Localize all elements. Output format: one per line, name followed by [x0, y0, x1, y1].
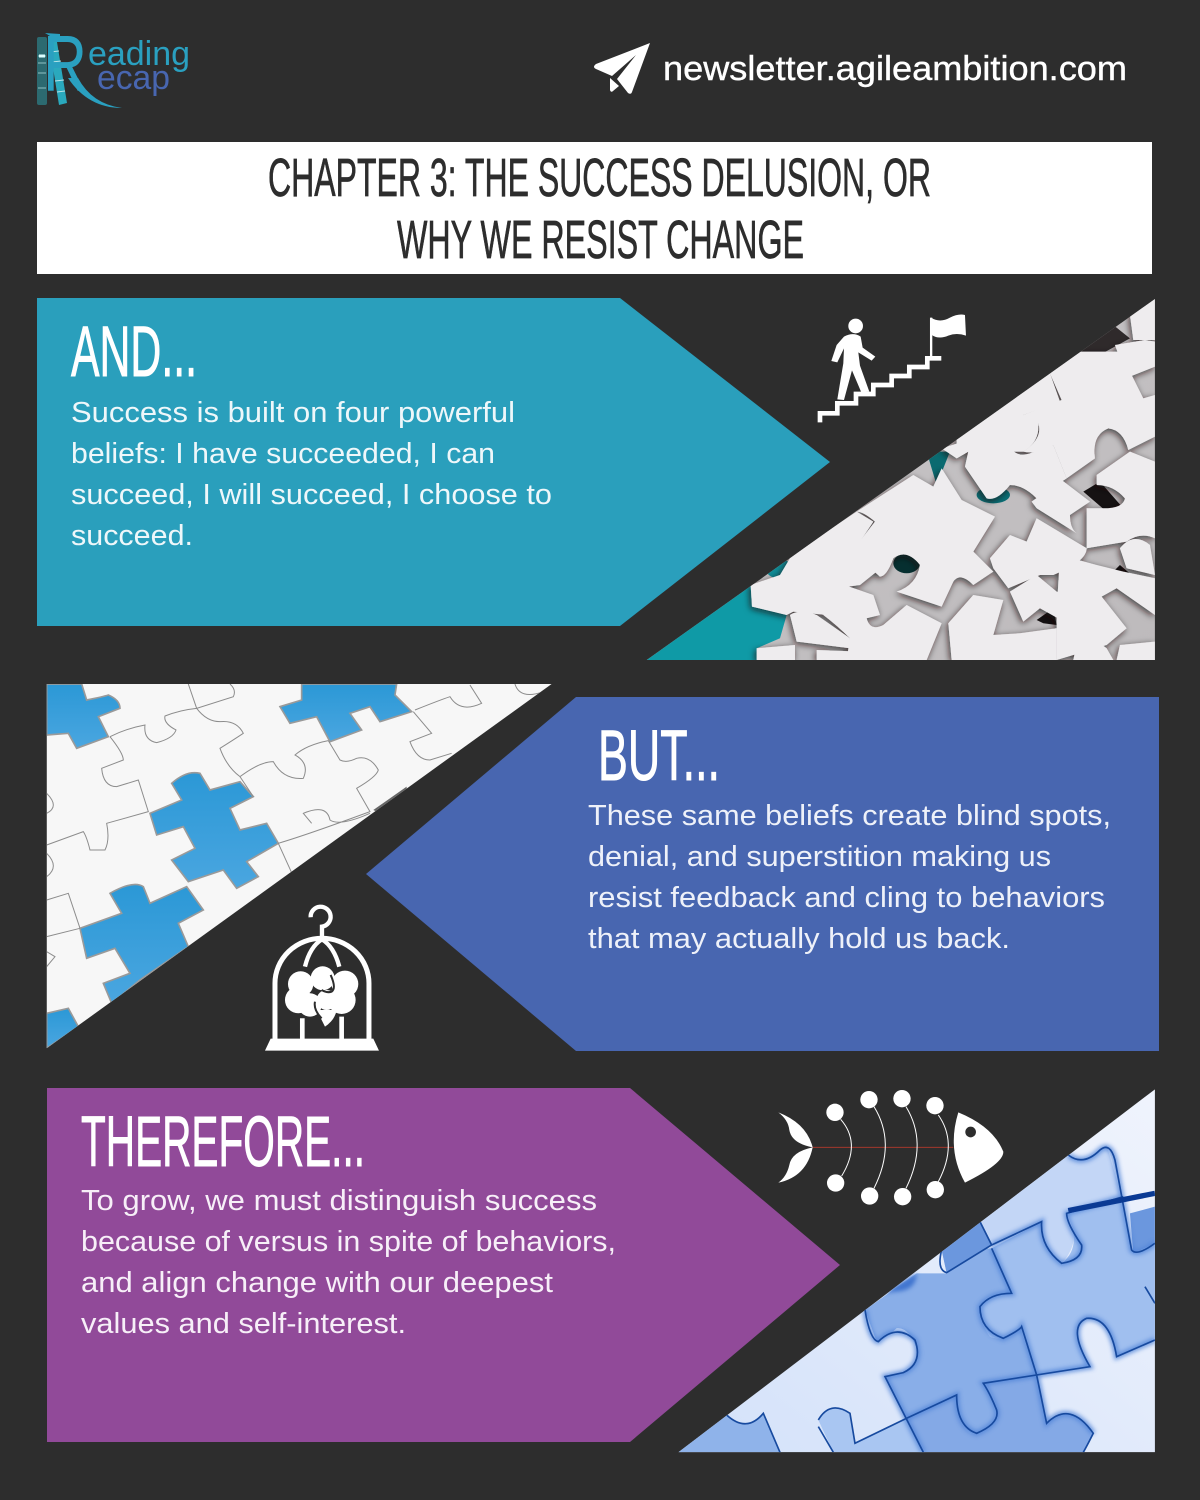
title banner: [37, 142, 1152, 274]
body text: and: Success is built on four powerful: [71, 397, 515, 429]
body text: but: [588, 800, 1111, 955]
teal arrow: [37, 298, 830, 626]
title line 2: WHY WE RESIST CHANGE: [397, 210, 804, 270]
logo word: eading: eading: [88, 35, 190, 73]
logo letter R: R: [43, 19, 87, 108]
scattered pieces: [1130, 299, 1155, 340]
panel: therefore: [47, 1080, 1160, 1460]
body text: but: that may actually hold us back.: [588, 923, 1010, 955]
body text: and: [71, 397, 552, 552]
icon: paper plane: [594, 43, 650, 94]
header link: [594, 43, 1127, 94]
body text: and: succeed.: [71, 520, 193, 552]
icon: teal book spine: [48, 36, 67, 105]
panel: but: [40, 680, 1159, 1055]
heading: but: BUT...: [598, 717, 720, 796]
photo: white puzzle with blue gaps: [40, 680, 560, 1055]
body text: therefore: values and self-interest.: [81, 1308, 406, 1340]
blue arrow: [366, 697, 1159, 1051]
logo word: ecap: ecap: [97, 59, 170, 97]
icon: brain in a birdcage: [265, 907, 379, 1051]
heading: and: AND...: [71, 313, 197, 392]
icon: walker climbing stairs to flag: [820, 315, 966, 422]
panel: and: [37, 295, 1160, 665]
body text: therefore: and align change with our deepest: [81, 1267, 553, 1299]
newsletter url: newsletter.agileambition.com: [663, 50, 1127, 88]
body text: therefore: To grow, we must distinguish success: [81, 1185, 597, 1217]
photo: blue puzzle pieces: [670, 1080, 1160, 1460]
body text: and: beliefs: I have succeeded, I can: [71, 438, 495, 470]
body text: and: succeed, I will succeed, I choose to: [71, 479, 552, 511]
body text: therefore: because of versus in spite of behaviors,: [81, 1226, 616, 1258]
purple arrow: [47, 1088, 840, 1442]
icon: fish skeleton: [778, 1090, 1003, 1205]
body text: but: resist feedback and cling to behaviors: [588, 882, 1105, 914]
body text: therefore: [81, 1185, 616, 1340]
body text: but: These same beliefs create blind spots,: [588, 800, 1111, 832]
logo: Reading Recap: [37, 19, 190, 108]
logo swash: [45, 33, 122, 108]
heading: therefore: THEREFORE...: [81, 1103, 365, 1182]
icon: dark book spine: [37, 37, 47, 105]
photo: scattered white puzzle pieces: [640, 295, 1160, 665]
body text: but: denial, and superstition making us: [588, 841, 1051, 873]
